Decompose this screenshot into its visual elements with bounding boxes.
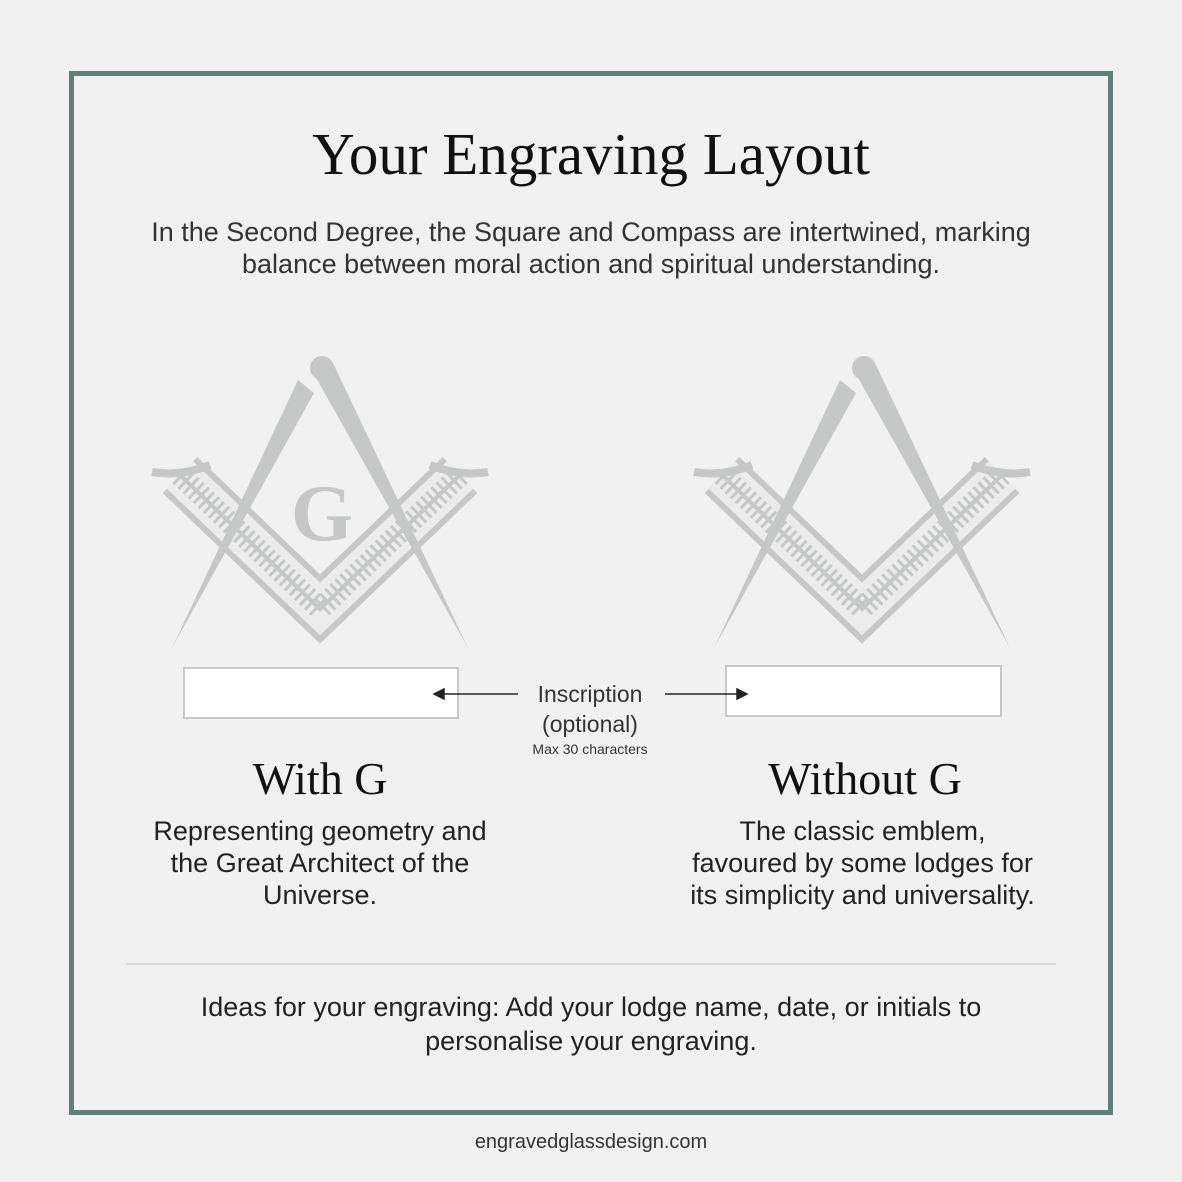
text: With G description: Representing geometry and	[153, 816, 487, 846]
frame border	[69, 71, 1113, 1115]
footer ideas text: Ideas for your engraving: Add your lodge name, date, or initials to	[201, 992, 981, 1022]
text: Without G description	[690, 816, 1035, 910]
intro text	[151, 217, 1031, 279]
text: With G description: the Great Architect of the	[171, 848, 469, 878]
heading: Without G: Without G	[768, 753, 962, 804]
icon: square and compass without G	[694, 356, 1030, 648]
intro text: In the Second Degree, the Square and Compass are intertwined, marking	[151, 217, 1031, 247]
inscription label	[532, 681, 648, 757]
title: Your Engraving Layout	[312, 121, 870, 187]
text: With G description	[153, 816, 487, 910]
text: Without G description: favoured by some lodges for	[692, 848, 1033, 878]
inscription boxes	[184, 666, 1001, 718]
intro text: balance between moral action and spiritual understanding.	[242, 249, 940, 279]
icon: square and compass with G: G	[291, 470, 353, 558]
text: With G description: Universe.	[263, 880, 377, 910]
footer ideas text: personalise your engraving.	[425, 1026, 757, 1056]
arrows	[434, 689, 747, 699]
inscription label: Inscription	[538, 681, 642, 707]
inscription label: Max 30 characters	[532, 741, 648, 757]
footer ideas text	[201, 992, 981, 1056]
text: Without G description: The classic emblem,	[739, 816, 986, 846]
text: Without G description: its simplicity and universality.	[690, 880, 1035, 910]
website: engravedglassdesign.com	[475, 1131, 707, 1153]
heading: With G: With G	[253, 753, 387, 804]
icon: square and compass with G	[152, 356, 488, 648]
inscription label: (optional)	[542, 711, 638, 737]
